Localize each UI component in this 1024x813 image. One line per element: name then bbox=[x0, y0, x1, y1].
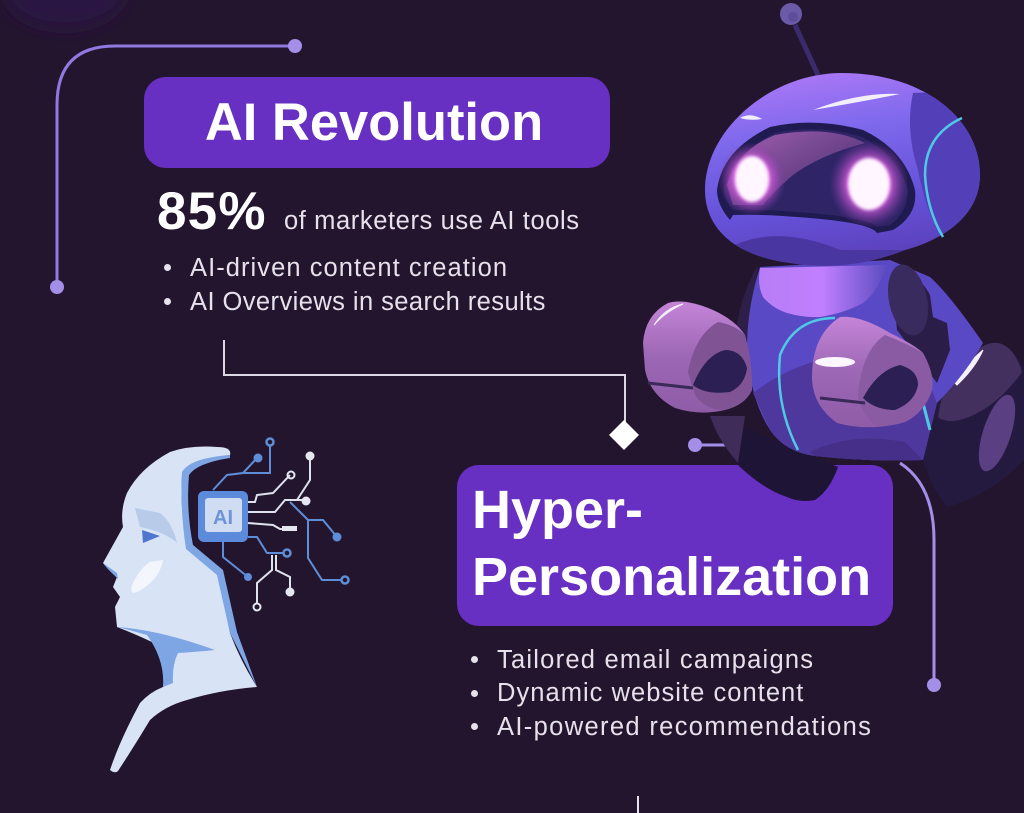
list: AI revolution: AI Overviews in search results bbox=[190, 288, 546, 316]
list: AI revolution bbox=[164, 254, 546, 316]
robot left wheel bbox=[710, 265, 838, 501]
heading: Hyper-Personalization bbox=[457, 465, 893, 626]
connector: top left bbox=[50, 39, 302, 294]
stat caption: of marketers use AI tools bbox=[284, 207, 580, 235]
icon: AI head bbox=[103, 438, 348, 772]
robot right hand bbox=[812, 317, 933, 427]
list: Hyper-personalization: Tailored email campaigns bbox=[497, 646, 814, 674]
connector: right bbox=[688, 438, 941, 692]
connector: bottom bbox=[637, 796, 639, 813]
list: AI revolution: AI-driven content creation bbox=[190, 254, 508, 282]
stat number: 85% bbox=[157, 182, 267, 241]
heading: AI Revolution: AI Revolution bbox=[205, 93, 543, 152]
robot antenna bbox=[780, 3, 818, 75]
heading: Hyper-Personalization: Hyper- bbox=[472, 480, 643, 540]
icon: robot bbox=[643, 3, 1024, 507]
robot right wheel bbox=[923, 343, 1024, 507]
heading: Hyper-Personalization: Personalization bbox=[472, 547, 871, 607]
icon: AI head: AI bbox=[213, 507, 233, 529]
stat: 85% of marketers bbox=[157, 182, 580, 241]
list: Hyper-personalization bbox=[471, 646, 872, 741]
connector: middle bbox=[224, 340, 639, 450]
robot left hand bbox=[643, 302, 752, 413]
corner glow bbox=[5, 0, 125, 28]
list: Hyper-personalization: Dynamic website content bbox=[497, 679, 804, 707]
robot head bbox=[705, 73, 980, 266]
heading: AI Revolution bbox=[144, 77, 610, 168]
list: Hyper-personalization: AI-powered recommendations bbox=[497, 713, 872, 741]
robot body bbox=[747, 260, 983, 460]
